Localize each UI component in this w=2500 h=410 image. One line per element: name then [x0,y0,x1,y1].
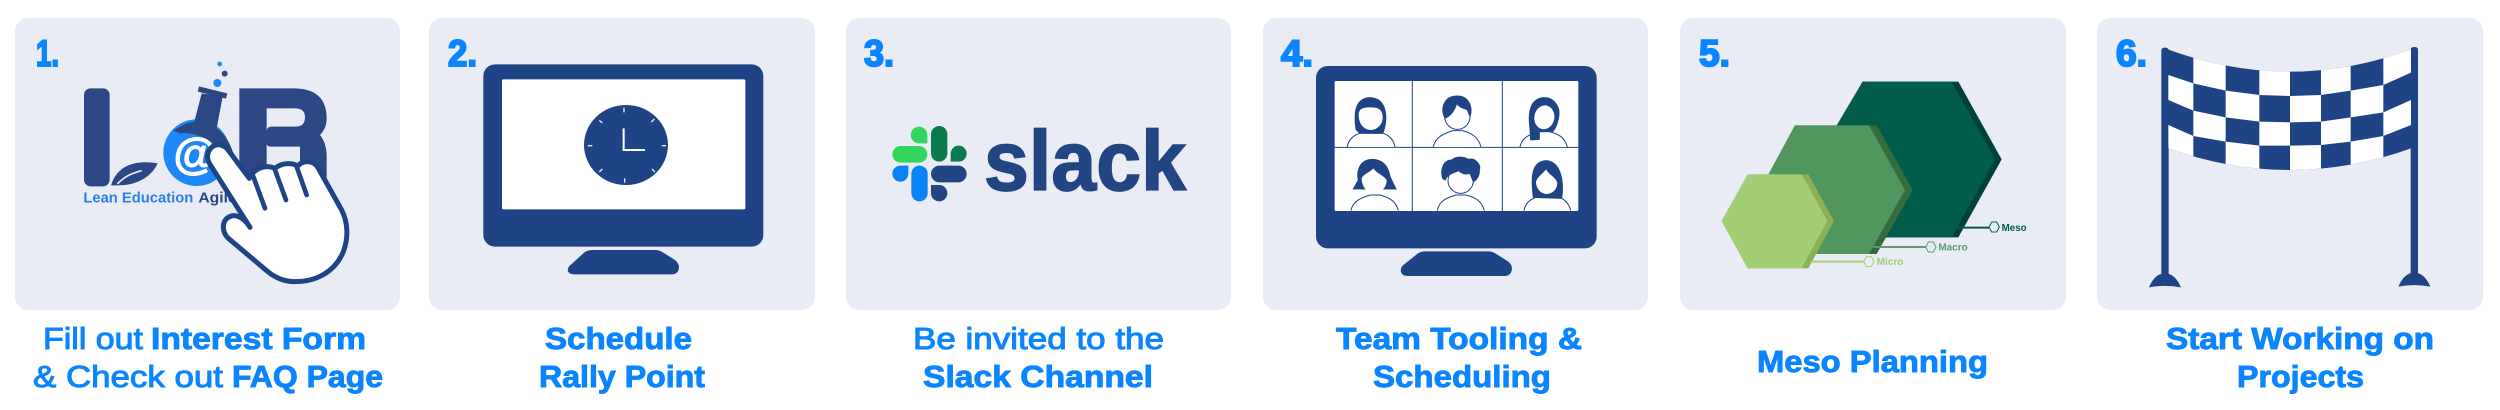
step number 1: 1. [36,33,59,74]
icon: LAB logo: @ [174,130,216,179]
legend: micro [1810,257,1903,268]
avatar 4 [1351,159,1398,211]
icon: monitor with video call [1316,66,1597,276]
icon: slack logo [892,114,1186,208]
caption 4 [1336,321,1582,394]
panel background 5 [1680,18,2066,310]
hexagon: macro [1760,125,1913,254]
panel: step 6 start working [2097,18,2483,394]
chart: nested hexagons [1722,82,2027,268]
caption 1: Fill out [43,321,143,356]
caption 4: Scheduling [1373,359,1551,394]
legend: macro [1873,242,1968,254]
panel: step 1 interest form [15,18,400,394]
caption 2: Schedule [545,321,692,356]
caption 1 [33,321,383,394]
panel: step 4 team tooling [1263,18,1648,394]
step number 3: 3. [864,33,894,74]
legend: macro: Macro [1938,243,1968,254]
panel background 2 [429,18,815,310]
panel background 4 [1263,18,1648,310]
avatar 5 [1437,157,1484,211]
icon: checkered finish flag [2149,46,2430,287]
legend: meso: Meso [2002,223,2027,234]
caption 6: Projects [2237,359,2364,394]
avatar 6 [1524,161,1571,211]
icon: slack logo: slack [984,114,1186,208]
icon: monitor with clock [483,64,763,274]
legend: meso [1957,222,2027,234]
avatar 1 [1347,98,1395,147]
step number 4: 4. [1281,33,1313,74]
panel: step 5 meso planning [1680,18,2066,379]
caption 1: FAQ Page [232,359,383,394]
caption 2: Rally Point [539,359,705,394]
caption 6 [2166,321,2434,394]
caption 3 [913,321,1164,394]
caption 1: Interest Form [151,321,366,356]
caption 3: Be invited to the [913,321,1164,356]
caption 5: Meso Planning [1757,344,1988,379]
legend: micro: Micro [1877,257,1903,268]
step number 2: 2. [448,33,477,74]
caption 3: Slack Channel [923,359,1153,394]
hexagon: meso [1817,82,2002,237]
panel background 1 [15,18,400,310]
avatar 3 [1520,98,1567,147]
caption 1: & Check out [33,359,223,394]
hexagon: micro [1722,174,1834,268]
panel background 6 [2097,18,2483,310]
icon: LAB logo: Agile [198,189,237,206]
panel background 3 [846,18,1231,310]
panel: step 2 rally point [429,18,815,394]
panel: step 3 slack [846,18,1231,394]
step number 6: 6. [2116,33,2147,74]
caption 2 [539,321,705,394]
icon: LAB logo [83,62,327,206]
caption 4: Team Tooling & [1336,321,1582,356]
avatar 2 [1433,96,1481,147]
step number 5: 5. [1699,33,1730,74]
icon: pointing hand [207,145,347,282]
caption 6: Start Working on [2166,321,2434,356]
icon: LAB logo: Lean Education [83,189,193,206]
